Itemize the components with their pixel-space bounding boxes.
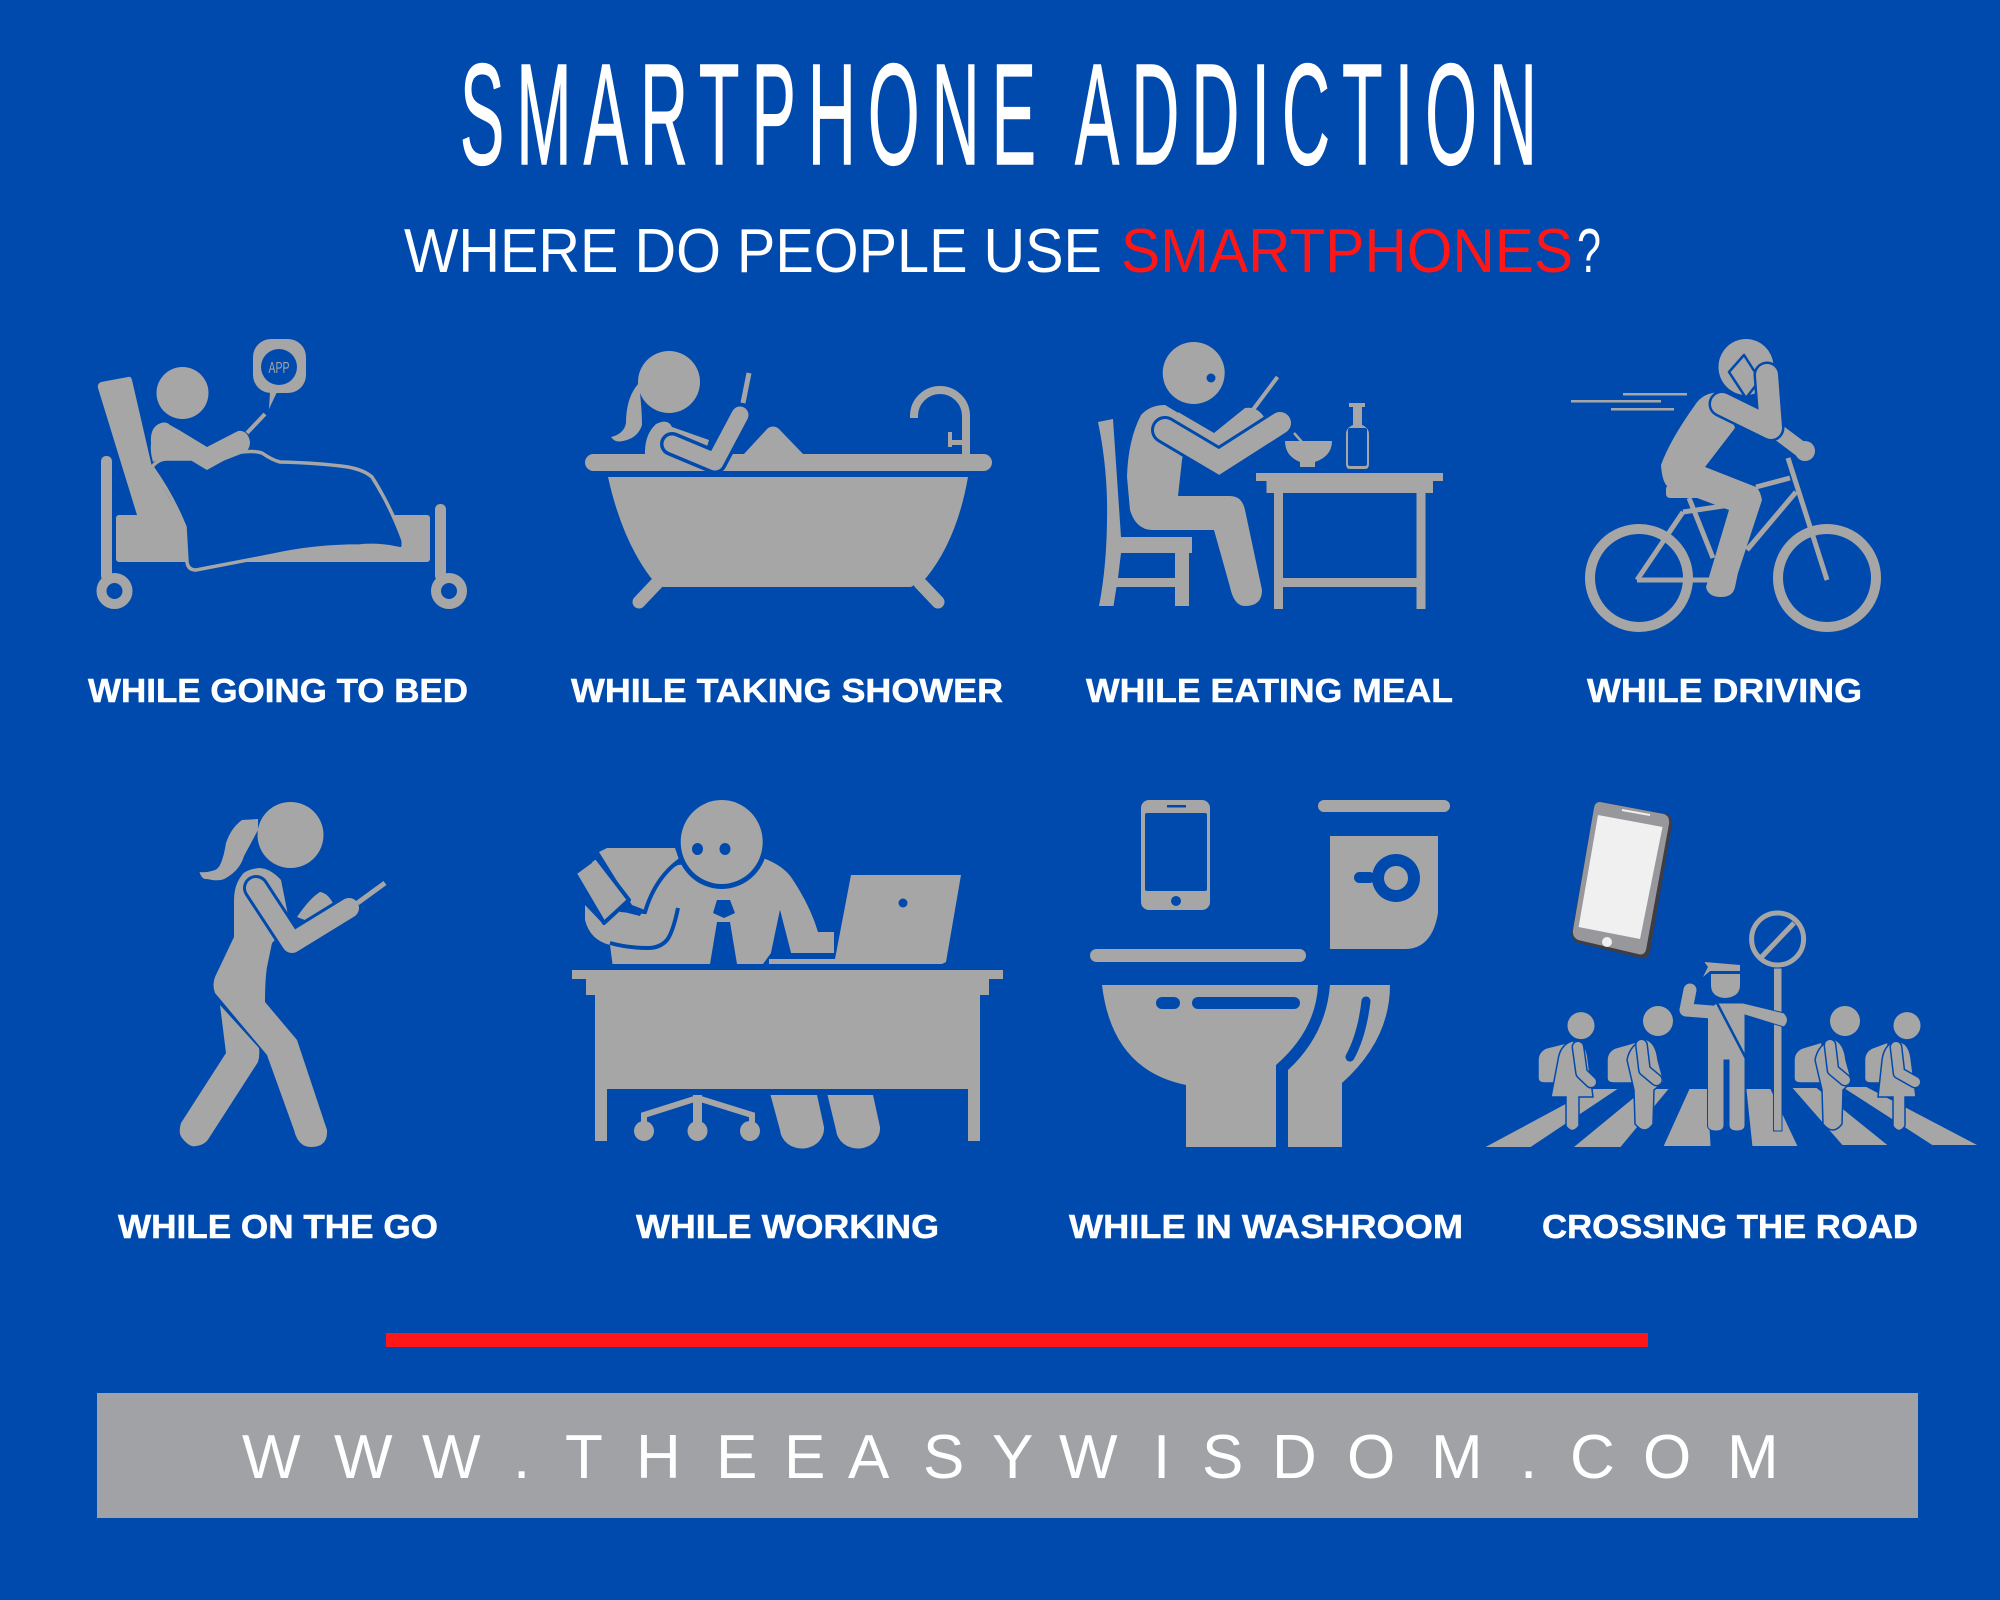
title: SMARTPHONE ADDICTION xyxy=(460,34,1537,195)
label: WHILE DRIVING xyxy=(1587,672,1862,709)
label: CROSSING THE ROAD xyxy=(1542,1208,1918,1245)
label: WHILE EATING MEAL xyxy=(1086,672,1453,709)
icon: person eating at table xyxy=(1098,342,1443,609)
label: WHILE IN WASHROOM xyxy=(1069,1208,1463,1245)
panel: while eating meal xyxy=(1086,342,1453,709)
subtitle: SMARTPHONES xyxy=(1121,217,1573,286)
icon: crossing guard and children xyxy=(1486,913,1977,1147)
icon: woman walking with phone xyxy=(180,802,385,1147)
icon: smartphone xyxy=(1572,802,1672,958)
icon: person in bed: APP xyxy=(268,360,290,377)
subtitle xyxy=(404,217,1601,286)
panel: while taking shower xyxy=(571,351,1003,709)
panel: while going to bed xyxy=(88,339,468,709)
icon: person in bathtub xyxy=(585,351,992,602)
footer bar xyxy=(97,1393,1918,1518)
panel: while in washroom xyxy=(1069,800,1463,1245)
icon: person riding a bicycle with phone xyxy=(1571,339,1876,627)
panel: while working xyxy=(572,795,1003,1245)
icon: person in bed xyxy=(98,339,462,604)
label: WHILE GOING TO BED xyxy=(88,672,468,709)
subtitle: WHERE DO PEOPLE USE xyxy=(404,217,1102,286)
label: WHILE ON THE GO xyxy=(118,1208,438,1245)
label: WHILE WORKING xyxy=(636,1208,939,1245)
panel: while on the go xyxy=(118,802,438,1245)
icon: man at desk with phone and laptop xyxy=(572,795,1003,1149)
website url: WWW.THEEASYWISDOM.COM xyxy=(242,1423,1779,1492)
panel: crossing the road xyxy=(1486,802,1977,1245)
icon: phone and toilet xyxy=(1090,800,1450,1147)
subtitle: ? xyxy=(1577,217,1601,286)
label: WHILE TAKING SHOWER xyxy=(571,672,1003,709)
panel: while driving xyxy=(1571,339,1876,709)
